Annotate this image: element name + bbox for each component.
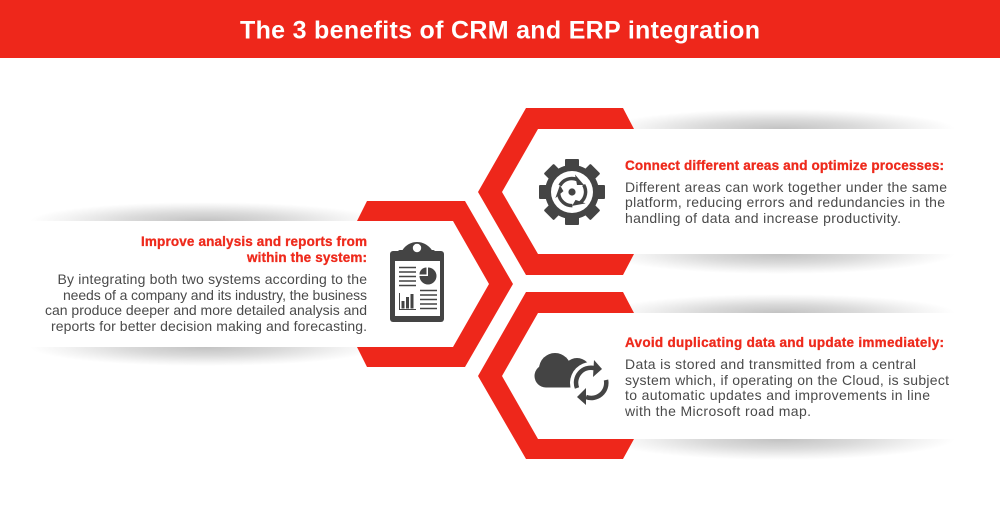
body text: system which, if operating on the Cloud, is subject	[625, 372, 949, 388]
panel shadows	[605, 109, 955, 274]
panel shadows	[605, 294, 955, 460]
body text	[624, 356, 949, 419]
body text: needs of a company and its industry, the business	[63, 287, 367, 303]
panel shadows	[30, 202, 380, 366]
red hexagon frame	[478, 292, 634, 459]
icon: gear	[539, 159, 605, 225]
body text: to automatic updates and improvements in line	[625, 387, 930, 403]
body text: Data is stored and transmitted from a central	[625, 356, 916, 372]
panel: connect different areas	[478, 108, 955, 275]
body text: with the Microsoft road map.	[624, 403, 811, 419]
body text: handling of data and increase productivity.	[625, 210, 901, 226]
heading: Improve analysis and reports from	[141, 234, 367, 249]
body text: can produce deeper and more detailed analysis and	[45, 302, 367, 318]
icon: cloud sync	[534, 353, 612, 405]
panel: avoid duplicating data	[478, 292, 955, 460]
body text: reports for better decision making and forecasting.	[51, 318, 367, 334]
body text: By integrating both two systems according to the	[58, 271, 367, 287]
heading: within the system:	[246, 250, 367, 265]
body text	[45, 271, 367, 334]
panel: improve analysis and reports	[30, 201, 513, 367]
body text	[625, 179, 947, 226]
red hexagon frame	[357, 201, 513, 367]
title: The 3 benefits of CRM and ERP integration	[240, 16, 760, 44]
heading: Connect different areas and optimize processes:	[625, 158, 944, 173]
heading: Avoid duplicating data and update immediately:	[625, 335, 944, 350]
icon: clipboard report	[390, 242, 444, 322]
body text: Different areas can work together under the same	[625, 179, 947, 195]
title banner	[0, 0, 1000, 58]
body text: platform, reducing errors and redundancies in the	[625, 194, 945, 210]
heading	[141, 234, 367, 265]
red hexagon frame	[478, 108, 634, 275]
